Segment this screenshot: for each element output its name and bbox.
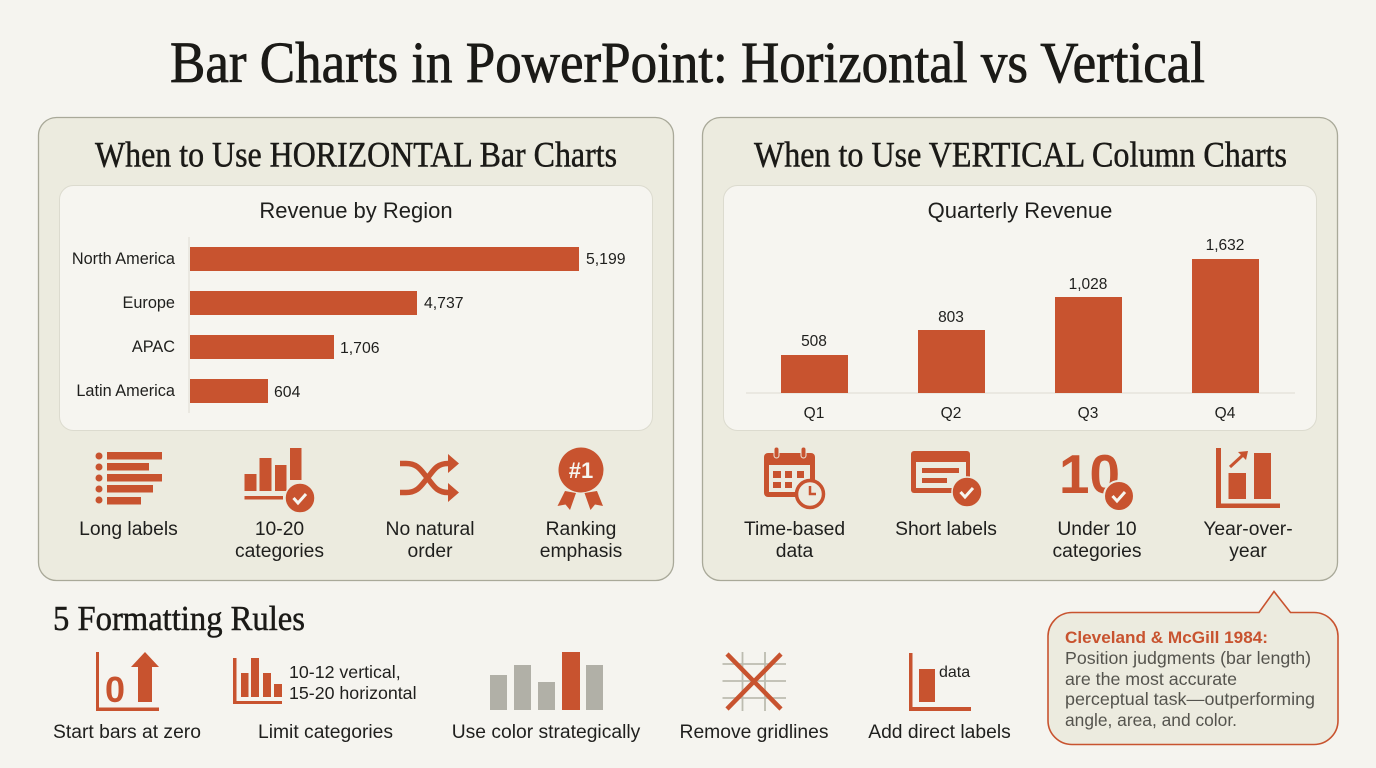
label: year-over-year: Year-over- <box>1203 519 1293 540</box>
icon: shuffle arrows <box>400 454 459 502</box>
icon: ranking medal <box>558 448 604 510</box>
icon: gray bars with one highlight <box>490 652 603 710</box>
bar chart: revenue by region: Europe <box>122 294 175 312</box>
icon: zero with up arrow <box>96 652 159 711</box>
column chart: quarterly revenue: 1,632 <box>1206 237 1244 254</box>
title: Bar Charts in PowerPoint: Horizontal vs Vertical <box>170 30 1205 95</box>
label: year-over-year: year <box>1229 541 1267 562</box>
icon: bar with data label: data <box>939 664 970 681</box>
label: no natural order: No natural <box>386 519 474 540</box>
label: no natural order: order <box>407 541 453 562</box>
rule: start bars at zero: Start bars at zero <box>53 722 201 743</box>
label: 10-20 categories: categories <box>235 541 324 562</box>
callout: Cleveland and McGill <box>1048 592 1338 744</box>
column chart: quarterly revenue: Q3 <box>1078 405 1098 422</box>
panel: vertical column charts <box>702 118 1338 580</box>
icon: short labels card <box>911 451 982 507</box>
icon: small column chart <box>233 658 282 704</box>
panel heading: horizontal: When to Use HORIZONTAL Bar Charts <box>95 134 617 174</box>
column chart: quarterly revenue: 508 <box>801 333 827 350</box>
column chart: quarterly revenue <box>724 186 1316 430</box>
rule: add direct labels <box>868 653 1011 743</box>
column chart: quarterly revenue: 803 <box>938 309 964 326</box>
rule: limit categories: 15-20 horizontal <box>289 683 417 703</box>
rule: remove gridlines <box>680 652 828 743</box>
icon: year-over-year <box>1216 448 1280 508</box>
callout: Cleveland and McGill: are the most accurate <box>1065 669 1237 689</box>
label: under 10 categories: Under 10 <box>1057 519 1137 540</box>
bar chart: revenue by region: 604 <box>274 384 301 401</box>
label: ranking emphasis: emphasis <box>540 541 622 562</box>
icon: calendar with clock <box>764 447 824 508</box>
label: long labels: Long labels <box>79 519 178 540</box>
rule: remove gridlines: Remove gridlines <box>680 722 828 743</box>
column chart: quarterly revenue: 1,028 <box>1069 276 1107 293</box>
callout: Cleveland and McGill: angle, area, and color. <box>1065 710 1237 730</box>
callout: Cleveland and McGill: Cleveland & McGill 1984: <box>1065 628 1268 647</box>
rule: add direct labels: Add direct labels <box>868 722 1011 743</box>
bar chart: revenue by region: Revenue by Region <box>259 198 453 223</box>
icon: under 10: 10 <box>1059 443 1120 505</box>
column chart: quarterly revenue: Q2 <box>941 405 961 422</box>
label: short labels: Short labels <box>895 519 997 540</box>
label: ranking emphasis: Ranking <box>546 519 616 540</box>
rule: use color strategically: Use color strategically <box>452 722 641 743</box>
column chart: quarterly revenue: Q4 <box>1215 405 1236 422</box>
bar chart: revenue by region: 1,706 <box>340 340 380 357</box>
rule: limit categories: Limit categories <box>258 722 393 743</box>
bar chart: revenue by region: Latin America <box>76 382 176 400</box>
bar chart: revenue by region: 4,737 <box>424 295 464 312</box>
bar chart: revenue by region: 5,199 <box>586 251 626 268</box>
label: time-based data: data <box>776 541 814 562</box>
bar chart: revenue by region <box>60 186 652 430</box>
heading: 5 formatting rules: 5 Formatting Rules <box>53 599 305 638</box>
icon: long labels <box>96 452 162 504</box>
bar chart: revenue by region: APAC <box>132 338 175 356</box>
panel: horizontal bar charts <box>38 118 674 580</box>
rule: limit categories <box>233 658 417 743</box>
label: 10-20 categories: 10-20 <box>255 519 304 540</box>
icon: bar with data label <box>909 653 971 711</box>
icon: crossed out grid <box>722 652 786 711</box>
bar chart: revenue by region: North America <box>72 250 176 268</box>
label: under 10 categories: categories <box>1053 541 1141 562</box>
callout: Cleveland and McGill: Position judgments (bar length) <box>1065 648 1311 668</box>
icon: 10-20 categories <box>244 448 315 513</box>
column chart: quarterly revenue: Quarterly Revenue <box>928 198 1112 223</box>
rule: use color strategically <box>452 652 641 743</box>
icon: zero with up arrow: 0 <box>105 669 125 710</box>
icon: ranking medal: #1 <box>569 458 593 483</box>
rule: start bars at zero <box>53 652 201 743</box>
label: time-based data: Time-based <box>744 519 845 540</box>
panel heading: vertical: When to Use VERTICAL Column Charts <box>754 134 1287 174</box>
rule: limit categories: 10-12 vertical, <box>289 662 401 682</box>
column chart: quarterly revenue: Q1 <box>804 405 824 422</box>
callout: Cleveland and McGill: perceptual task—outperforming <box>1065 689 1315 709</box>
